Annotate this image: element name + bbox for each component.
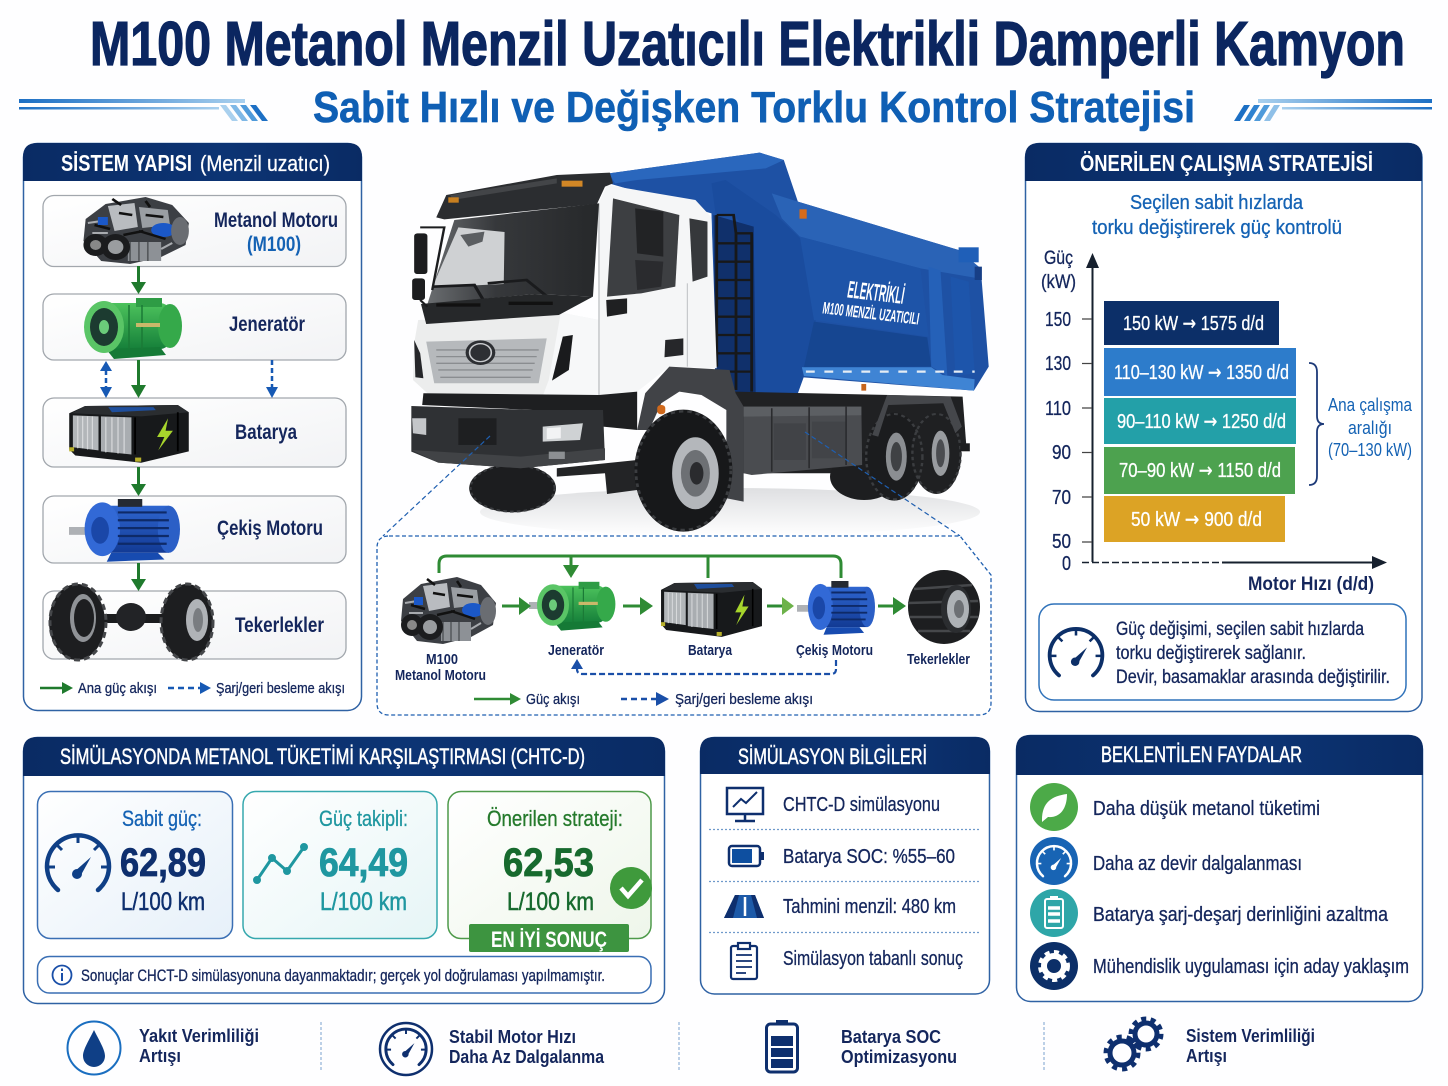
note: simulation disclaimer: Sonuçlar CHCT-D simülasyonuna dayanmaktadır; gerçek yol doğrulaması yapılmamıştır. xyxy=(81,966,605,985)
cab xyxy=(412,173,717,396)
labels: flow components: Tekerlekler xyxy=(907,651,970,668)
heading: system structure xyxy=(61,150,330,176)
row: generator xyxy=(43,294,346,360)
far front wheel xyxy=(469,460,637,512)
brace: main operating range xyxy=(1309,363,1324,485)
legend: system panel: Ana güç akışı xyxy=(78,680,157,697)
chart axis labels xyxy=(1041,248,1374,595)
labels: flow components: Jeneratör xyxy=(548,642,604,659)
chart: power vs motor speed xyxy=(1041,248,1413,595)
row: methanol engine: Metanol Motoru xyxy=(214,209,338,232)
footer: fuel efficiency: Yakıt Verimliliği xyxy=(139,1026,259,1046)
icon: gauge xyxy=(47,835,109,890)
item: CHTC-D simulation: CHTC-D simülasyonu xyxy=(783,794,940,816)
panel: methanol consumption comparison xyxy=(23,737,665,1004)
label: main operating range: aralığı xyxy=(1348,418,1392,438)
callout: strategy note: Güç değişimi, seçilen sabit hızlarda xyxy=(1116,619,1364,640)
decoration: left header stripes xyxy=(19,99,268,121)
body lettering xyxy=(821,276,921,328)
chart axis labels: 110 xyxy=(1045,398,1071,420)
benefit: reduced depth of discharge xyxy=(1030,889,1389,937)
footer: fuel efficiency xyxy=(68,1022,259,1074)
legend: system panel: Şarj/geri besleme akışı xyxy=(216,680,345,697)
legend: flow panel: Şarj/geri besleme akışı xyxy=(675,691,813,708)
truck illustration: M100 MENZİL UZATICILI xyxy=(821,298,921,328)
item: battery SOC xyxy=(729,846,955,868)
benefit: engineering candidate xyxy=(1030,942,1409,990)
callout: strategy note xyxy=(1039,604,1406,700)
panel: powertrain flow xyxy=(377,536,991,715)
panel: system structure xyxy=(23,143,362,710)
arrow: feedback loop xyxy=(571,659,836,674)
benefit: lower methanol consumption: Daha düşük metanol tüketimi xyxy=(1093,798,1320,820)
arrows: power flow in system panel xyxy=(131,266,146,591)
bar: 150 kW xyxy=(1104,301,1279,345)
subtitle: Sabit Hızlı ve Değişken Torklu Kontrol Stratejisi xyxy=(313,83,1195,132)
icon: road xyxy=(724,895,764,918)
front fender xyxy=(637,367,744,502)
badge: best result: EN İYİ SONUÇ xyxy=(491,927,607,952)
card: proposed strategy: Önerilen strateji: xyxy=(487,806,623,831)
labels: flow components: M100 xyxy=(426,651,458,668)
row: methanol engine: (M100) xyxy=(247,233,301,256)
item: battery SOC: Batarya SOC: %55–60 xyxy=(783,846,955,868)
heading: benefits: BEKLENTİLEN FAYDALAR xyxy=(1101,742,1302,767)
chart axis labels: Motor Hızı (d/d) xyxy=(1248,574,1374,595)
icon: check badge xyxy=(610,867,652,909)
heading: simulation information: SİMÜLASYON BİLGİLERİ xyxy=(738,744,927,769)
legend: flow panel: Güç akışı xyxy=(526,691,580,708)
row: battery xyxy=(43,398,346,467)
label: main operating range xyxy=(1328,395,1413,460)
dump body xyxy=(609,153,989,393)
item: estimated range xyxy=(724,895,956,918)
footer: stable motor speed: Daha Az Dalgalanma xyxy=(449,1047,605,1067)
strategy subtitle xyxy=(1092,192,1342,239)
labels: flow components xyxy=(395,642,970,684)
row: traction motor: Çekiş Motoru xyxy=(217,517,323,540)
card: power following xyxy=(243,792,437,938)
icon: battery xyxy=(766,1020,798,1072)
icon: trend line xyxy=(254,844,308,884)
footer: stable motor speed: Stabil Motor Hızı xyxy=(449,1027,576,1047)
card: power following: L/100 km xyxy=(320,888,407,916)
ladder xyxy=(717,215,753,392)
card: constant power xyxy=(38,792,232,938)
row: methanol engine xyxy=(43,196,346,266)
row: battery: Batarya xyxy=(235,421,297,444)
icon: wheel xyxy=(908,570,980,644)
callout: strategy note: torku değiştirerek sağlanır. xyxy=(1116,643,1306,664)
icon: gears xyxy=(1106,1019,1161,1069)
icon: generator xyxy=(529,582,615,631)
labels: flow components: Metanol Motoru xyxy=(395,667,486,684)
heading: comparison: SİMÜLASYONDA METANOL TÜKETİMİ KARŞILAŞTIRMASI (CHTC-D) xyxy=(60,744,585,769)
labels: flow components: Batarya xyxy=(688,642,733,659)
front wheel xyxy=(634,410,732,532)
benefit: lower methanol consumption xyxy=(1030,783,1320,831)
legend: system panel xyxy=(40,680,345,697)
ground shadow under truck xyxy=(480,488,980,536)
item: CHTC-D simulation xyxy=(727,788,940,821)
chart axis labels: 130 xyxy=(1045,353,1071,375)
icon: battery xyxy=(729,846,764,866)
row: generator: Jeneratör xyxy=(229,313,305,336)
panel: operating strategy xyxy=(1025,143,1422,712)
row: traction motor xyxy=(43,496,346,563)
footer: system efficiency: Sistem Verimliliği xyxy=(1186,1026,1315,1046)
icon: M100 engine xyxy=(401,577,496,644)
benefit: reduced depth of discharge: Batarya şarj-deşarj derinliğini azaltma xyxy=(1093,904,1389,926)
bar: 70–90 kW xyxy=(1104,447,1295,494)
chart axis labels: 90 xyxy=(1052,442,1071,464)
callout lines from truck to flow diagram xyxy=(383,432,960,536)
icon: gauge xyxy=(1050,629,1102,675)
chart axes xyxy=(1082,253,1387,569)
icon: gauge xyxy=(380,1023,432,1075)
rear wheels and chassis xyxy=(734,384,970,501)
card: constant power: L/100 km xyxy=(121,888,205,916)
icon: drop xyxy=(68,1022,120,1074)
panel: simulation information xyxy=(700,737,990,994)
chart axis labels: (kW) xyxy=(1041,272,1076,293)
label: main operating range: (70–130 kW) xyxy=(1328,440,1412,460)
truck illustration: ELEKTRİKLİ xyxy=(846,276,907,309)
heading: system structure: SİSTEM YAPISI xyxy=(61,150,192,176)
footer: system efficiency xyxy=(1106,1019,1315,1069)
chart axis labels: 70 xyxy=(1052,487,1071,509)
bumper and lower front xyxy=(411,392,637,468)
footer: battery SOC: Batarya SOC xyxy=(841,1027,941,1047)
strategy subtitle: torku değiştirerek güç kontrolü xyxy=(1092,217,1342,239)
heading: system structure: (Menzil uzatıcı) xyxy=(200,151,330,176)
chart axis labels: Güç xyxy=(1044,248,1073,269)
card: power following: Güç takipli: xyxy=(319,806,408,831)
bar: 50 kW: 50 kW → 900 d/d xyxy=(1131,507,1262,531)
card: constant power: 62,89 xyxy=(120,841,206,885)
footer: battery SOC xyxy=(766,1020,957,1072)
icon: clipboard xyxy=(731,943,757,979)
label: main operating range: Ana çalışma xyxy=(1328,395,1413,415)
strategy subtitle: Seçilen sabit hızlarda xyxy=(1130,192,1304,214)
footer: system efficiency: Artışı xyxy=(1186,1046,1227,1066)
footer: stable motor speed xyxy=(380,1023,605,1075)
card: proposed strategy: L/100 km xyxy=(507,888,594,916)
chart axis labels: 50 xyxy=(1052,531,1071,553)
row: wheels xyxy=(43,584,346,660)
icon: battery xyxy=(661,582,762,637)
card: proposed strategy xyxy=(448,792,652,952)
icon: traction motor xyxy=(797,581,875,635)
arrow: green power bus xyxy=(439,556,841,578)
battery box on chassis xyxy=(744,407,862,475)
bar: 150 kW: 150 kW → 1575 d/d xyxy=(1123,311,1264,335)
benefit: less speed fluctuation: Daha az devir dalgalanması xyxy=(1093,853,1302,875)
legend: flow panel xyxy=(474,691,813,708)
card: power following: 64,49 xyxy=(319,841,408,885)
bar: 110–130 kW xyxy=(1104,348,1296,396)
bar: 70–90 kW: 70–90 kW → 1150 d/d xyxy=(1119,458,1281,482)
decoration: right header stripes xyxy=(1234,99,1432,121)
chart axis labels: 150 xyxy=(1045,309,1071,331)
bar: 50 kW xyxy=(1104,496,1285,542)
benefit: less speed fluctuation xyxy=(1030,837,1302,885)
callout: strategy note: Devir, basamaklar arasında değiştirilir. xyxy=(1116,667,1390,688)
footer: battery SOC: Optimizasyonu xyxy=(841,1047,957,1067)
arrows: charge feedback in system panel xyxy=(100,360,278,398)
note: simulation disclaimer xyxy=(38,956,651,993)
truck illustration xyxy=(411,153,989,532)
chart axis labels: 0 xyxy=(1062,553,1071,575)
bar: 90–110 kW xyxy=(1104,398,1296,444)
bar: 90–110 kW: 90–110 kW → 1250 d/d xyxy=(1117,409,1286,433)
bar: 110–130 kW: 110–130 kW → 1350 d/d xyxy=(1114,360,1289,384)
heading: strategy: ÖNERİLEN ÇALIŞMA STRATEJİSİ xyxy=(1080,150,1373,176)
card: proposed strategy: 62,53 xyxy=(503,841,594,885)
item: estimated range: Tahmini menzil: 480 km xyxy=(783,896,956,918)
panel: expected benefits xyxy=(1016,735,1423,1002)
item: simulation-based result xyxy=(731,943,963,979)
arrows: flow between components xyxy=(502,597,906,615)
icon: monitor xyxy=(727,788,763,821)
item: simulation-based result: Simülasyon tabanlı sonuç xyxy=(783,948,963,970)
labels: flow components: Çekiş Motoru xyxy=(796,642,873,659)
row: wheels: Tekerlekler xyxy=(235,614,324,637)
footer: fuel efficiency: Artışı xyxy=(139,1046,181,1066)
card: constant power: Sabit güç: xyxy=(122,806,202,831)
